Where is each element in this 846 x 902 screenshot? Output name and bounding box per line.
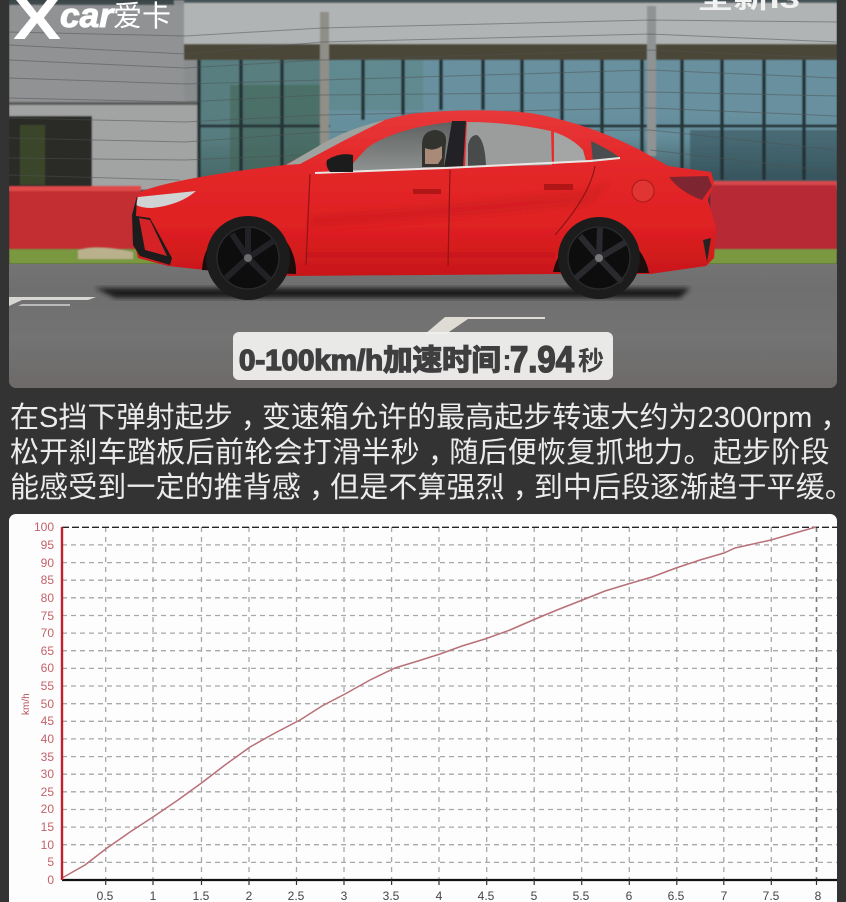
headlight xyxy=(136,191,196,208)
rear wheel xyxy=(558,217,640,299)
y axis labels: 60 xyxy=(41,661,54,675)
description text: 松开刹车踏板后前轮会打滑半秒 ，随后便恢复抓地力。起步阶段 xyxy=(10,436,830,469)
front side window xyxy=(353,122,452,170)
horizontal grid lines xyxy=(62,545,837,862)
tail light xyxy=(669,176,712,200)
windshield xyxy=(286,120,385,165)
grass verge xyxy=(9,247,837,264)
y axis labels xyxy=(34,520,54,887)
time label: 7.94 xyxy=(510,339,574,380)
y axis labels: 20 xyxy=(41,802,54,816)
wheel arches xyxy=(202,242,296,274)
y axis labels: 80 xyxy=(41,591,54,605)
y axis labels: 25 xyxy=(41,785,54,799)
vertical grid lines xyxy=(106,527,816,880)
y axis labels: 40 xyxy=(41,732,54,746)
time label: 秒 xyxy=(578,346,604,376)
description text xyxy=(10,401,846,504)
top axis xyxy=(62,526,837,528)
rear window xyxy=(465,122,552,167)
car body xyxy=(132,110,716,276)
panel: acceleration chart xyxy=(9,514,837,902)
B pillar xyxy=(444,121,466,168)
y axis labels: 95 xyxy=(41,538,54,552)
x axis labels xyxy=(97,889,822,902)
y axis labels: 100 xyxy=(34,520,54,534)
description text: 在S挡下弹射起步 ，变速箱允许的最高起步转速大约为2300rpm ， xyxy=(10,401,846,434)
belt chrome xyxy=(315,158,620,173)
y axis labels: 15 xyxy=(41,820,54,834)
rear bumper vent xyxy=(703,238,711,262)
y axis labels: 55 xyxy=(41,679,54,693)
door handles xyxy=(413,184,573,194)
road xyxy=(9,264,837,388)
time label xyxy=(233,332,613,380)
door lines xyxy=(306,166,595,266)
driver xyxy=(422,130,446,167)
y axis labels: 10 xyxy=(41,838,54,852)
y axis labels: 5 xyxy=(47,855,54,869)
logo: XCAR 爱卡: 爱卡 xyxy=(113,0,171,33)
building background xyxy=(9,0,837,190)
time label: : xyxy=(502,344,512,377)
y axis title: km/h xyxy=(21,693,32,715)
y axis labels: 45 xyxy=(41,714,54,728)
speed curve xyxy=(62,527,816,878)
car xyxy=(132,110,716,300)
y axis xyxy=(61,527,63,880)
fuel cap xyxy=(632,180,654,202)
y axis labels: 65 xyxy=(41,644,54,658)
time label: 0-100km/h加速时间 xyxy=(239,344,501,377)
y axis labels: 35 xyxy=(41,750,54,764)
body crease xyxy=(312,186,602,226)
y axis labels: 30 xyxy=(41,767,54,781)
y axis labels: 50 xyxy=(41,697,54,711)
description text: 能感受到一定的推背感 ，但是不算强烈 ，到中后段逐渐趋于平缓。 xyxy=(10,471,846,504)
y axis labels: 85 xyxy=(41,573,54,587)
front grille xyxy=(132,196,172,265)
mirror xyxy=(326,154,353,172)
front wheel xyxy=(206,216,290,300)
y axis labels: 75 xyxy=(41,609,54,623)
red barrier xyxy=(9,181,837,252)
y axis labels: 70 xyxy=(41,626,54,640)
logo: XCAR 爱卡 xyxy=(14,0,170,39)
fence wires xyxy=(9,20,837,180)
x axis xyxy=(62,880,837,885)
y axis labels: 0 xyxy=(47,873,54,887)
y axis labels: 90 xyxy=(41,556,54,570)
panel: car photo xyxy=(9,0,837,388)
